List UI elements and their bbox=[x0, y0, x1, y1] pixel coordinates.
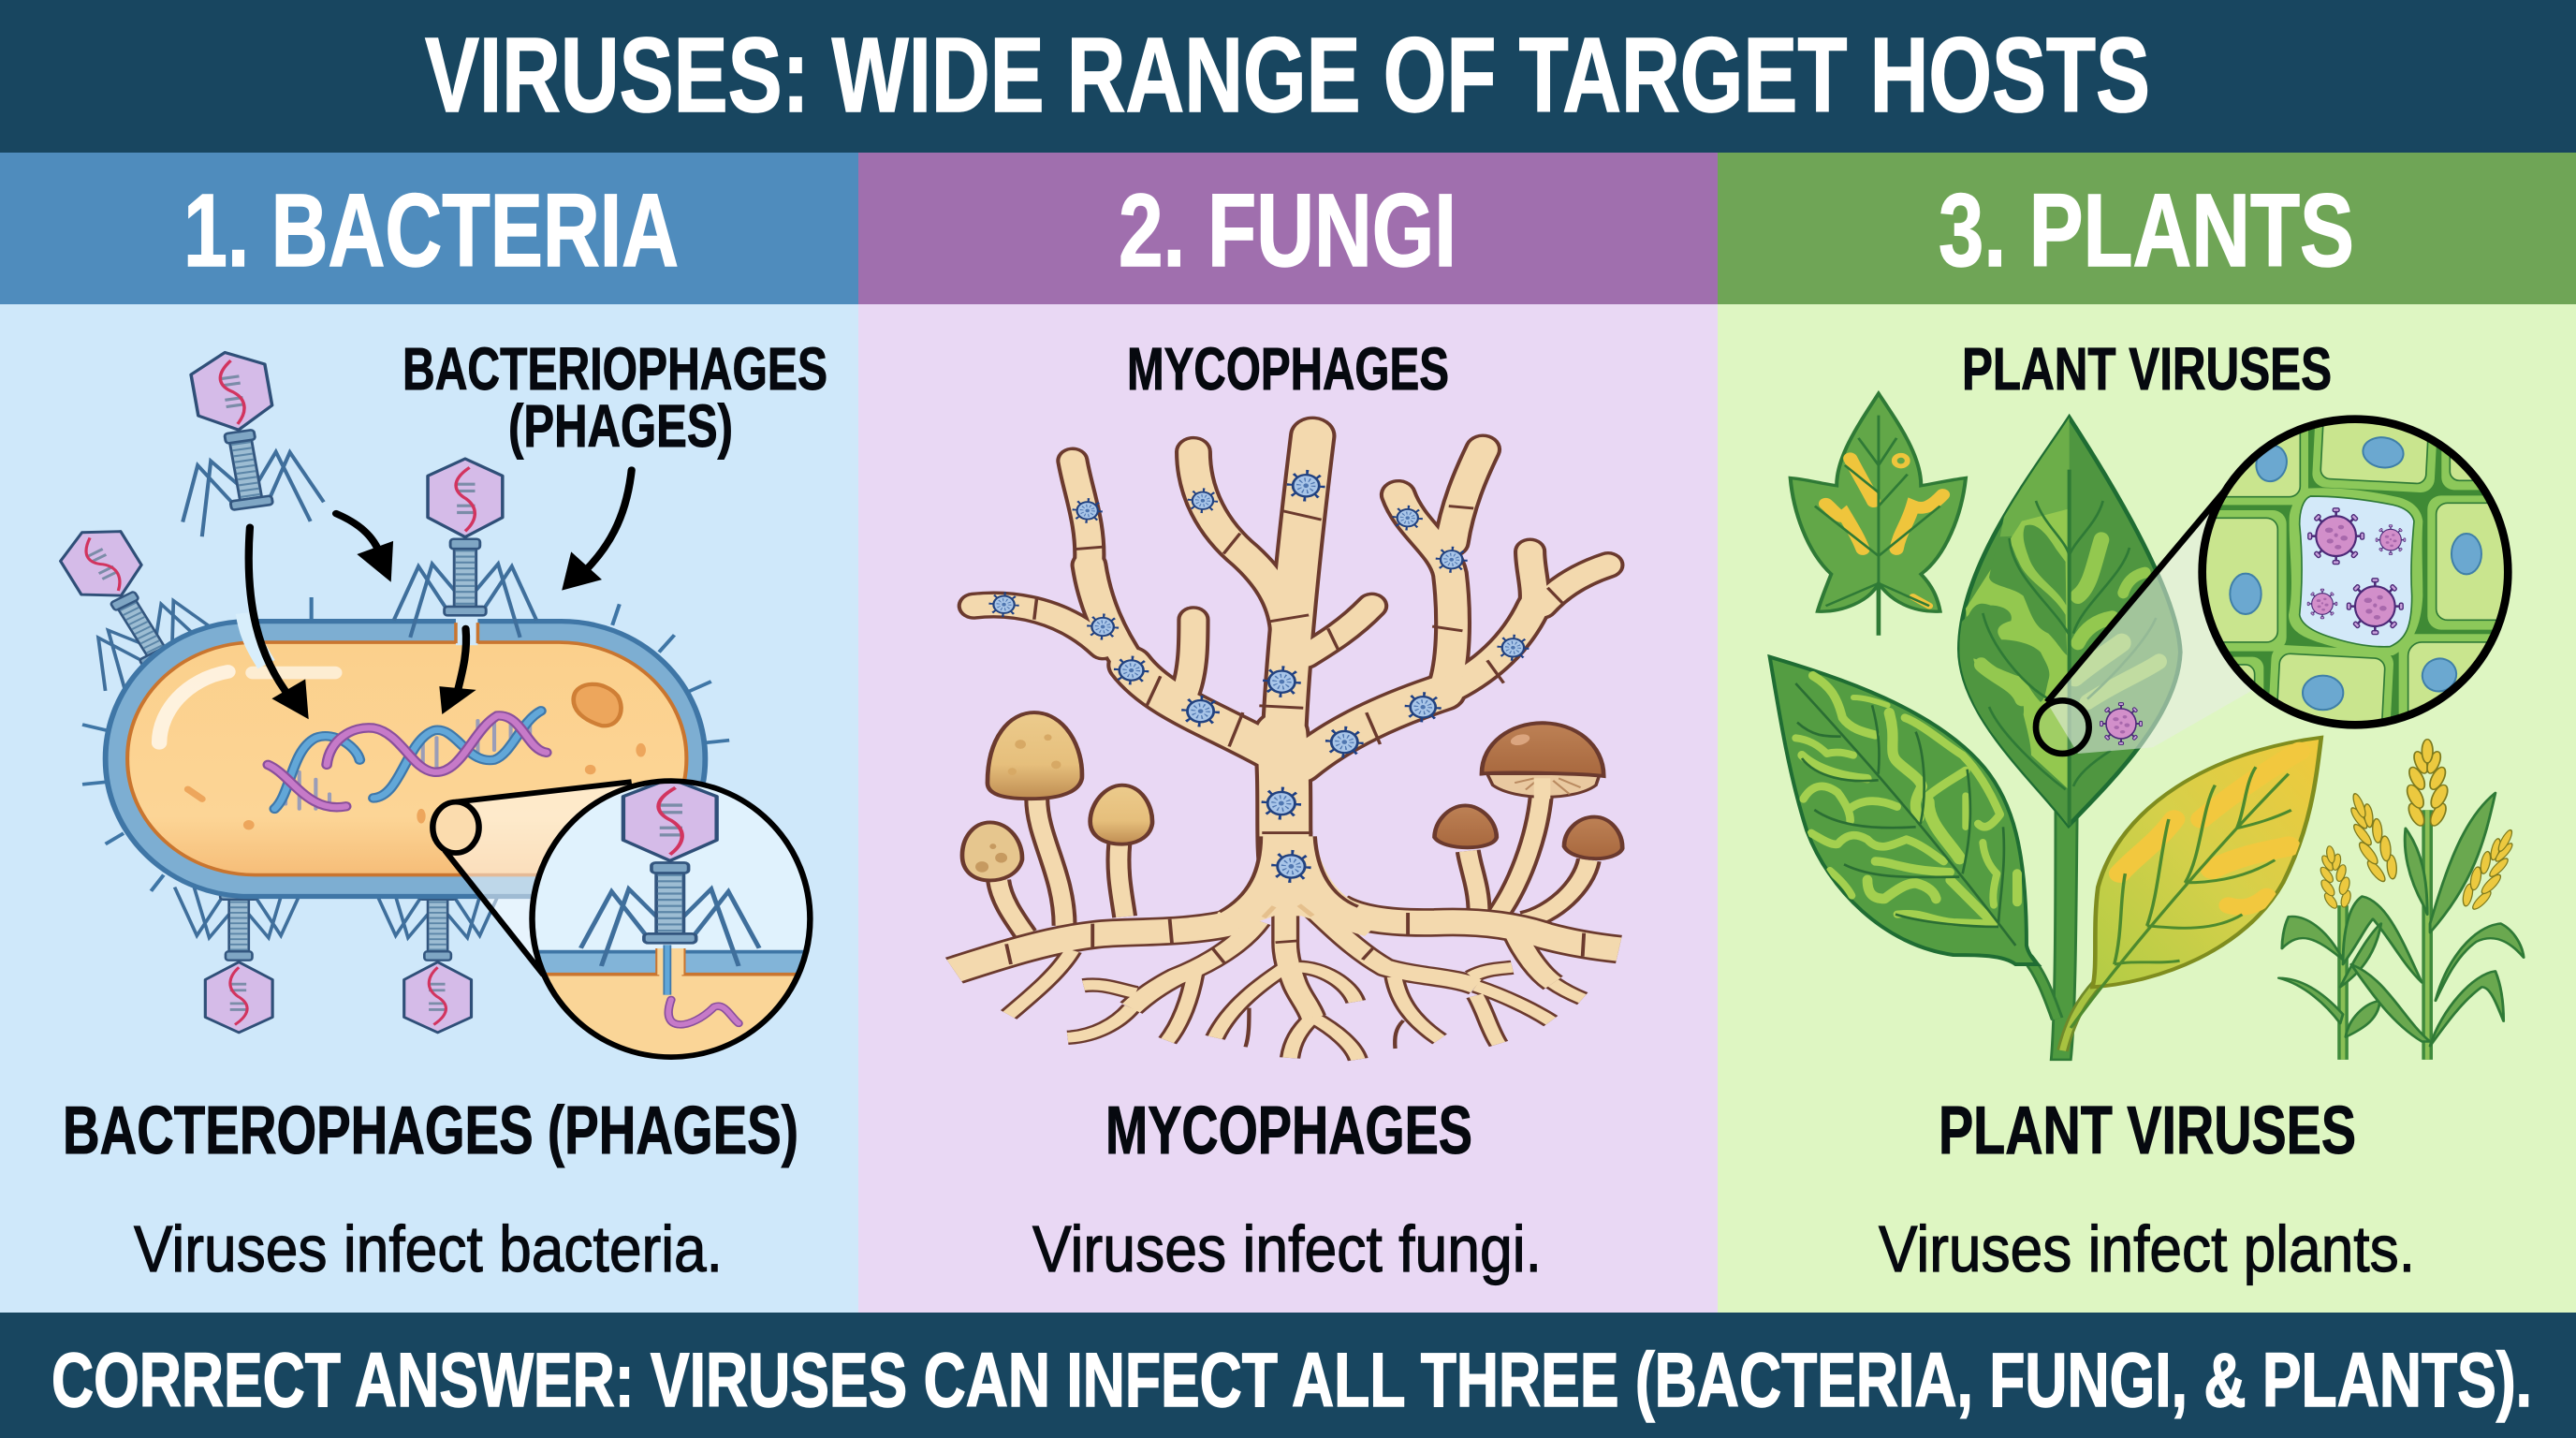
mycelium branches bbox=[973, 435, 1608, 873]
header: bacteria bbox=[0, 153, 858, 304]
label: bacteriophages: BACTERIOPHAGES bbox=[402, 335, 827, 403]
mushroom: brown small right bbox=[1564, 817, 1622, 858]
small infected leaf bbox=[1791, 393, 1966, 636]
header: bacteria: 1. BACTERIA bbox=[183, 173, 679, 288]
cereal plants bbox=[2278, 740, 2525, 1060]
magnifier inset: plant cells bbox=[2198, 415, 2512, 729]
caption: mycophages name: MYCOPHAGES bbox=[1105, 1093, 1472, 1168]
panel: plants bbox=[1718, 153, 2576, 1313]
title bar bbox=[0, 0, 2576, 153]
caption: phages name: BACTEROPHAGES (PHAGES) bbox=[63, 1093, 798, 1168]
virus on leaf bbox=[2100, 703, 2142, 744]
header: fungi: 2. FUNGI bbox=[1119, 173, 1456, 288]
phage: free floating bbox=[154, 343, 327, 539]
magnifier pointer bbox=[2036, 485, 2230, 754]
panel: fungi bbox=[858, 153, 1718, 1313]
arrow halo bbox=[245, 613, 267, 665]
magnifier cone bbox=[2047, 487, 2259, 754]
roots bbox=[954, 906, 1618, 1060]
label: bacteriophages bbox=[402, 335, 827, 460]
arrow: into cell bbox=[249, 527, 309, 719]
mushroom: brown large bbox=[1482, 723, 1603, 799]
root septa bbox=[1006, 913, 1584, 964]
illustration: mycelium and mushrooms bbox=[954, 435, 1622, 1060]
mushroom: tan medium bbox=[1090, 785, 1152, 844]
illustration: bacterium and phages bbox=[24, 343, 812, 1063]
caption: infect fungi: Viruses infect fungi. bbox=[1032, 1212, 1542, 1285]
bacterium body bbox=[106, 618, 705, 897]
small leaf, stem and stalks bbox=[1791, 393, 2098, 1060]
header: fungi bbox=[858, 153, 1718, 304]
header: plants: 3. PLANTS bbox=[1939, 173, 2354, 288]
trunk flare bbox=[1006, 836, 1584, 964]
arrow: to surface bbox=[336, 514, 393, 582]
label: mycophages: MYCOPHAGES bbox=[1127, 335, 1449, 403]
septa bbox=[1034, 506, 1563, 833]
mushroom stems bbox=[999, 774, 1588, 935]
phage: docked on top bbox=[394, 459, 536, 638]
caption: plant viruses name: PLANT VIRUSES bbox=[1939, 1093, 2356, 1168]
phage: upper left bbox=[24, 504, 228, 705]
yellowing leaf bbox=[2071, 738, 2321, 1028]
mushroom: tan large bbox=[988, 712, 1082, 799]
DNA helix bbox=[268, 711, 547, 809]
magnifier cone bbox=[445, 782, 632, 976]
mushroom: tan small bbox=[962, 822, 1022, 880]
caption: infect plants: Viruses infect plants. bbox=[1879, 1212, 2415, 1285]
leaf stalks bbox=[2027, 958, 2098, 1050]
panel: bacteria bbox=[0, 153, 858, 1313]
main mottled leaf bbox=[1954, 415, 2180, 830]
branch details and fruiting bodies bbox=[962, 472, 1622, 881]
label: bacteriophages: (PHAGES) bbox=[508, 392, 733, 460]
large mosaic leaf bbox=[1770, 657, 2038, 964]
header: plants bbox=[1718, 153, 2576, 304]
label: plant viruses: PLANT VIRUSES bbox=[1962, 335, 2332, 403]
mushroom: brown small left bbox=[1435, 805, 1497, 847]
illustration: infected plants bbox=[1770, 393, 2529, 1060]
arrow: DNA injection bbox=[439, 628, 476, 714]
phage: bottom left bbox=[175, 872, 303, 1033]
caption: infect bacteria: Viruses infect bacteria. bbox=[134, 1212, 723, 1285]
phage: bottom right bbox=[373, 872, 502, 1033]
viruses in cell bbox=[2307, 508, 2406, 635]
arrow: from label bbox=[562, 470, 632, 591]
magnifier inset bbox=[432, 778, 812, 1063]
answer bar bbox=[0, 1313, 2576, 1438]
main stem bbox=[2051, 805, 2077, 1060]
viruses on hyphae bbox=[991, 472, 1527, 881]
bacterium spikes bbox=[82, 597, 729, 891]
